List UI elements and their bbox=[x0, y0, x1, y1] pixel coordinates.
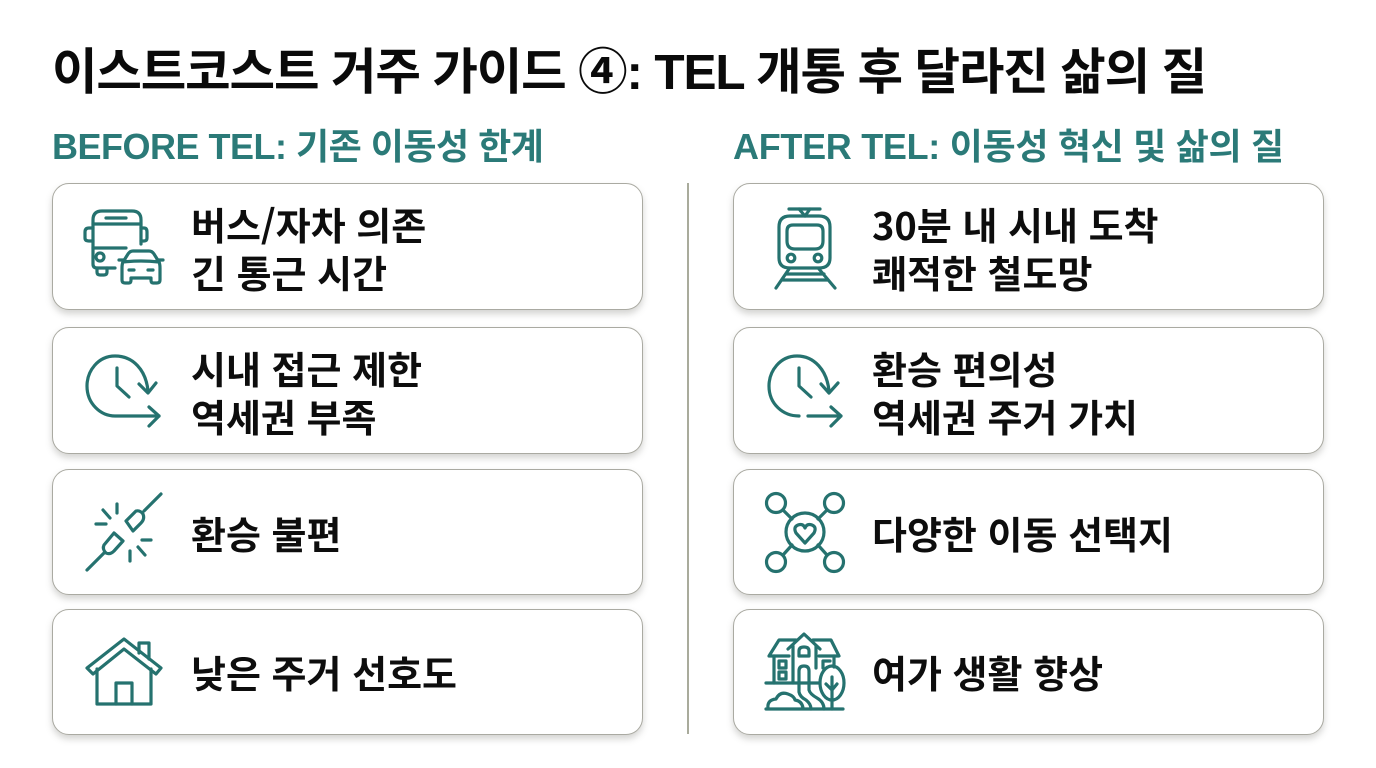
text bbox=[191, 340, 422, 443]
card: low residential preference bbox=[52, 609, 643, 735]
text bbox=[872, 196, 1159, 299]
icon: clock with arrow bbox=[767, 354, 843, 428]
text: 낮은 주거 선호도 bbox=[191, 644, 457, 699]
heading: before TEL: BEFORE TEL: 기존 이동성 한계 bbox=[52, 126, 543, 167]
text bbox=[191, 196, 426, 299]
icon: clock with arrow bbox=[85, 354, 161, 428]
card: transfer convenience bbox=[733, 327, 1324, 454]
card: bus and car dependence bbox=[52, 183, 643, 310]
icon: network with heart bbox=[764, 492, 846, 574]
icon: bus and car bbox=[83, 209, 165, 285]
card: inconvenient transfers bbox=[52, 469, 643, 595]
card: diverse mobility options bbox=[733, 469, 1324, 595]
text: 역세권 주거 가치 bbox=[872, 388, 1138, 443]
text: 다양한 이동 선택지 bbox=[872, 505, 1173, 560]
icon: broken connection bbox=[85, 492, 163, 572]
card: downtown in 30 minutes bbox=[733, 183, 1324, 310]
text: 30분 내 시내 도착 bbox=[872, 196, 1159, 251]
text: 환승 편의성 bbox=[872, 340, 1057, 395]
text: 환승 불편 bbox=[191, 505, 341, 560]
center divider bbox=[687, 183, 689, 734]
card: better leisure life bbox=[733, 609, 1324, 735]
icon: tram on rails bbox=[774, 207, 837, 290]
heading: after TEL: AFTER TEL: 이동성 혁신 및 삶의 질 bbox=[733, 126, 1284, 167]
text: 버스/자차 의존 bbox=[191, 196, 426, 251]
text bbox=[872, 340, 1138, 443]
text: 역세권 부족 bbox=[191, 388, 376, 443]
icon: house with tree bbox=[764, 632, 846, 711]
text: 시내 접근 제한 bbox=[191, 340, 422, 395]
title: 이스트코스트 거주 가이드 ④: TEL 개통 후 달라진 삶의 질 bbox=[52, 45, 1206, 100]
text: 쾌적한 철도망 bbox=[872, 244, 1092, 299]
text: 여가 생활 향상 bbox=[872, 644, 1103, 699]
card: limited downtown access bbox=[52, 327, 643, 454]
icon: house bbox=[85, 637, 163, 706]
text: 긴 통근 시간 bbox=[191, 244, 387, 299]
